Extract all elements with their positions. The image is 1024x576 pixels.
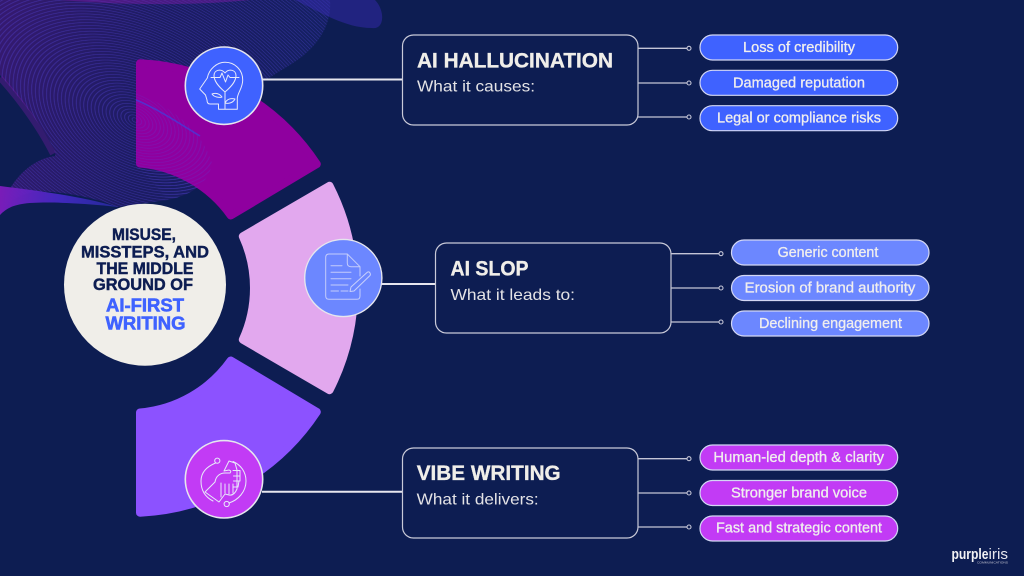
central title circle: THE MIDDLE: [96, 259, 194, 278]
connectors: vibe writing: [638, 457, 691, 529]
segment: vibe writing arc: [140, 360, 317, 513]
icon: document and pencil: [305, 239, 382, 317]
pill: stronger brand voice: [700, 480, 898, 506]
icon: head with heart: [185, 47, 263, 124]
pill: legal or compliance risks: Legal or compliance risks: [717, 110, 881, 126]
pill: declining engagement: Declining engagement: [759, 316, 902, 332]
pill: fast and strategic content: Fast and strategic content: [716, 520, 882, 536]
connector: icon to vibe writing: [262, 491, 403, 493]
pill: human-led depth and clarity: Human-led depth & clarity: [713, 450, 885, 466]
pill: generic content: [732, 240, 929, 265]
central title circle: AI-FIRST: [106, 295, 185, 316]
pill: damaged reputation: Damaged reputation: [733, 75, 865, 91]
pill: generic content: Generic content: [778, 245, 878, 261]
wave overlay on arc: [136, 92, 212, 200]
subheading: leads to: What it leads to:: [450, 287, 575, 304]
background wave pattern: [0, 0, 382, 215]
logo: purpleiris: iris: [988, 546, 1008, 563]
pill: declining engagement: [732, 311, 929, 336]
pill: human-led depth and clarity: [700, 445, 898, 470]
pill: erosion of brand authority: Erosion of brand authority: [745, 280, 916, 296]
subheading: delivers: What it delivers:: [417, 492, 539, 509]
central title circle: [64, 204, 226, 366]
panel: AI slop: [436, 243, 671, 333]
icon: handshake: [185, 441, 263, 518]
heading: vibe writing: VIBE WRITING: [417, 462, 561, 485]
pill: erosion of brand authority: [732, 276, 929, 300]
heading: AI slop: AI SLOP: [450, 258, 528, 281]
pill: stronger brand voice: Stronger brand voice: [731, 486, 867, 502]
connectors: AI slop: [671, 252, 723, 324]
logo: purpleiris: purple: [952, 546, 988, 563]
pill: loss of credibility: Loss of credibility: [743, 40, 856, 56]
segment: AI slop arc: [243, 186, 354, 390]
pill: fast and strategic content: [700, 516, 898, 541]
central title circle: GROUND OF: [93, 275, 193, 294]
central title circle: MISUSE,: [112, 225, 176, 244]
pill: legal or compliance risks: [700, 106, 898, 131]
pill: damaged reputation: [700, 70, 898, 95]
panel: vibe writing: [402, 448, 638, 538]
central title circle: MISSTEPS, AND: [81, 242, 209, 261]
heading: AI hallucination: AI HALLUCINATION: [417, 49, 613, 72]
panel: AI hallucination: [402, 35, 638, 125]
connectors: AI hallucination: [638, 46, 691, 119]
connector: icon to AI slop: [381, 283, 436, 285]
segment: AI hallucination arc: [140, 63, 317, 215]
logo: purpleiris: COMMUNICATIONS: [977, 560, 1008, 564]
pill: loss of credibility: [700, 35, 898, 60]
central title circle: WRITING: [106, 312, 186, 333]
connector: icon to AI hallucination: [262, 78, 403, 80]
subheading: causes: What it causes:: [417, 79, 535, 96]
